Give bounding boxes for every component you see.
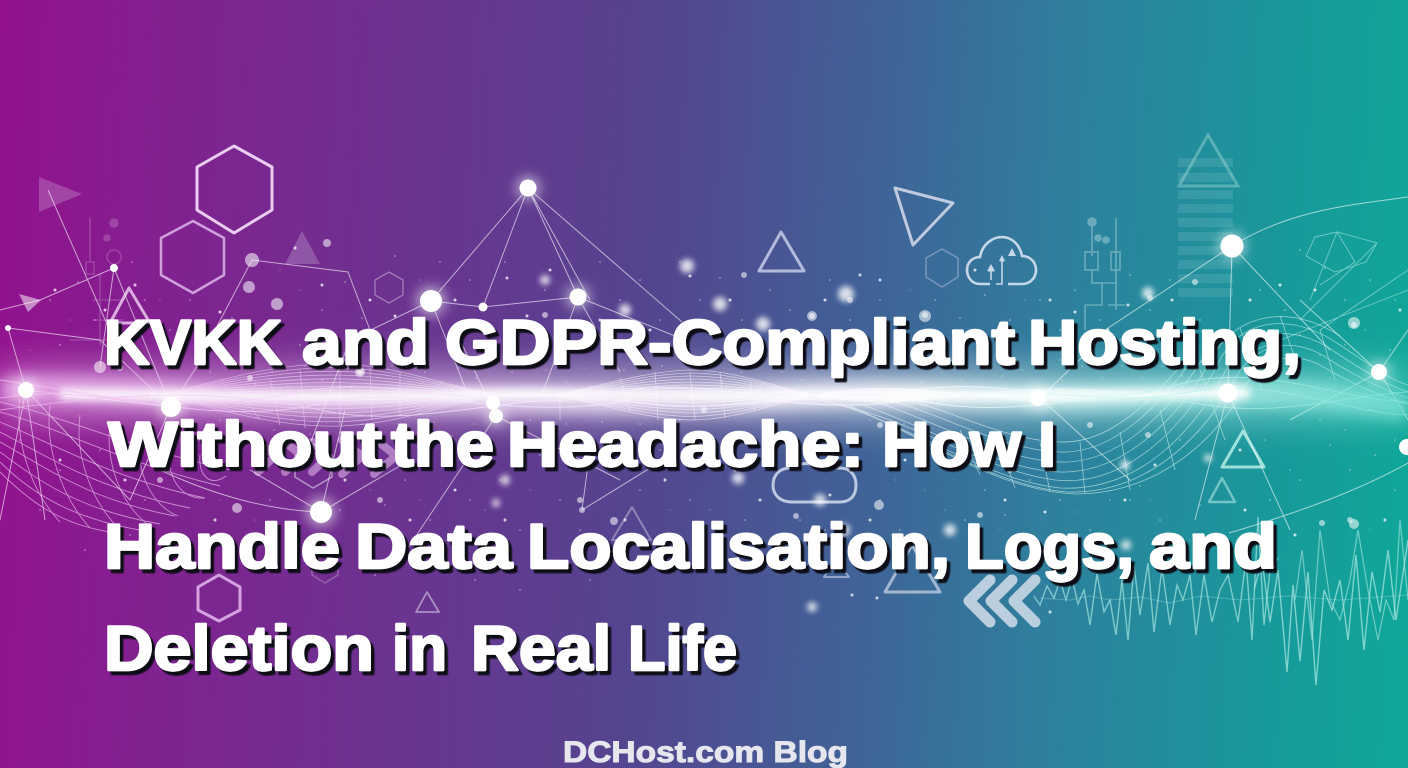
title line 2: Without	[108, 410, 382, 480]
network lines	[0, 188, 1408, 560]
title line 3: Logs,	[965, 512, 1134, 582]
icon: cloud outline lower	[773, 464, 856, 502]
title line 2: Headache:	[507, 410, 864, 480]
title line 1: KVKK	[104, 308, 282, 378]
icon: cloud upload	[967, 237, 1036, 284]
light band	[0, 368, 1408, 420]
title line 1: GDPR-Compliant	[445, 308, 1015, 378]
title line 4: in	[392, 614, 447, 684]
background shapes: hexagons and triangles left	[19, 146, 651, 621]
outline shapes right	[759, 188, 1264, 592]
title	[104, 308, 1301, 684]
title line 1: Hosting,	[1028, 308, 1301, 378]
right faded ladder and triangle	[1178, 135, 1238, 297]
title line 3: Handle	[104, 512, 340, 582]
title line 4: Life	[628, 614, 737, 684]
title line 3: Localisation,	[527, 512, 950, 582]
glowing network nodes	[5, 176, 1408, 529]
title line 2: I	[1038, 410, 1056, 480]
title line 3: and	[1149, 512, 1277, 582]
title line 4: Deletion	[104, 614, 374, 684]
mesh wave centre	[150, 364, 1180, 428]
title line 2: How	[882, 410, 1022, 480]
right faded circuit	[1085, 218, 1125, 330]
icon: double chevrons	[969, 580, 1035, 622]
title line 1	[104, 308, 1301, 378]
title line 1: and	[302, 308, 429, 378]
mesh wave right	[820, 316, 1408, 494]
title line 3	[104, 512, 1277, 582]
title line 4: Real	[471, 614, 611, 684]
left faded circuit	[70, 218, 130, 345]
stars and particles	[20, 248, 1400, 612]
title line 4	[104, 614, 737, 684]
waveform	[1034, 517, 1408, 685]
title line 2: the	[391, 410, 494, 480]
mesh wave left	[0, 400, 230, 532]
title line 2	[108, 410, 1056, 480]
title line 3: Data	[355, 512, 513, 582]
